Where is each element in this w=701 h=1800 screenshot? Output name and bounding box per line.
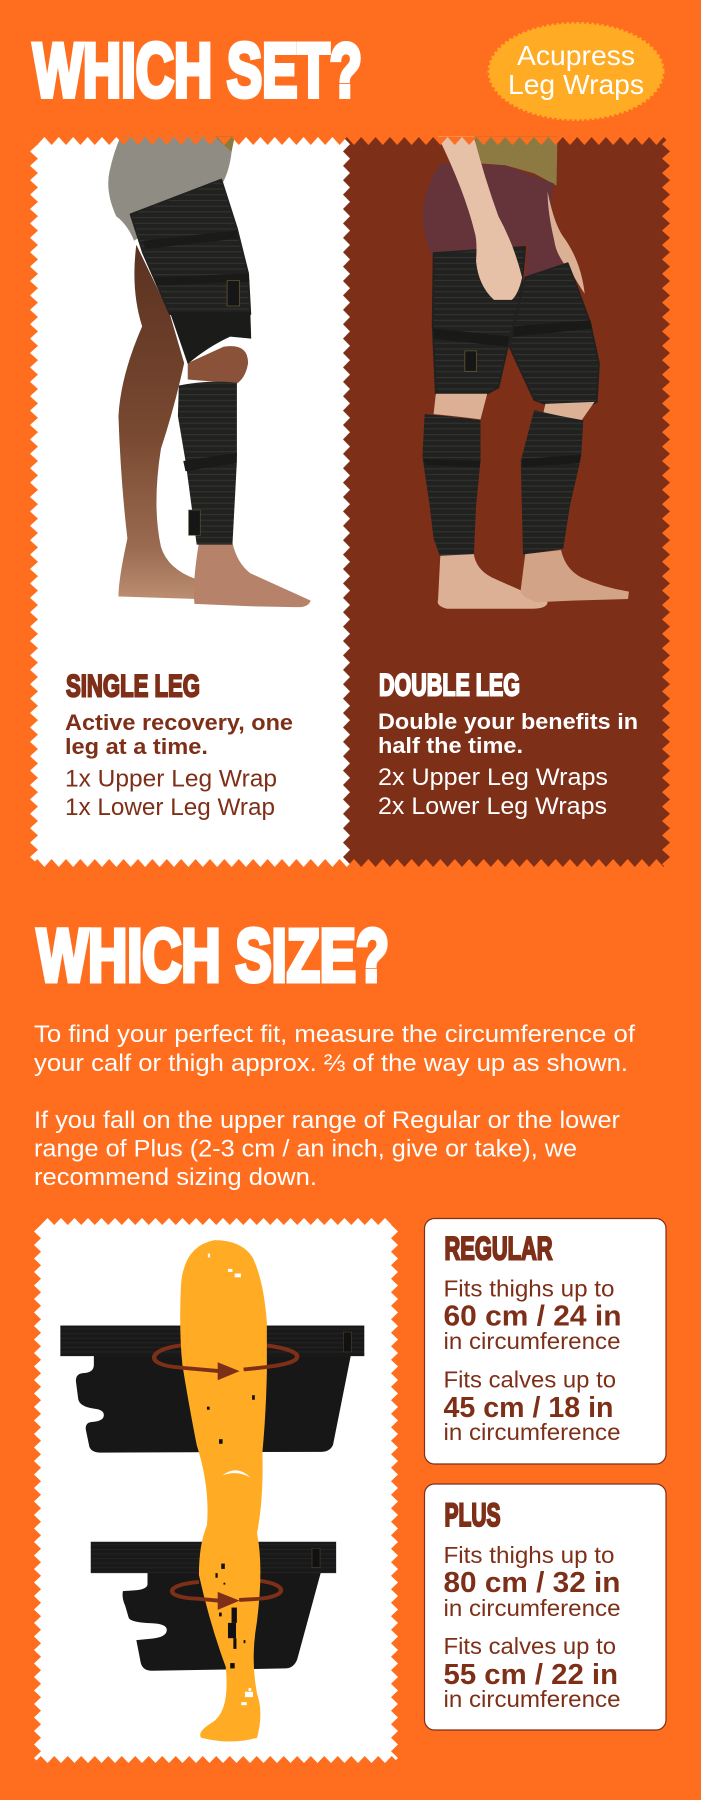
card: plus size: Fits calves up to (444, 1633, 616, 1659)
card: regular size: Fits thighs up to (444, 1276, 614, 1302)
text block: how to measure: If you fall on the upper range of Regular or the lower (34, 1107, 620, 1134)
zigzag edges (30, 137, 350, 867)
card: plus size: 55 cm / 22 in (444, 1659, 618, 1691)
title: which set: WHICH SET? (33, 28, 362, 114)
icon: plus wrap (91, 1542, 336, 1671)
badge: acupress leg wraps (489, 23, 663, 119)
arrow: thigh measure (180, 1362, 268, 1380)
card: regular size: Fits calves up to (444, 1366, 616, 1392)
zigzag edges (343, 137, 670, 867)
card: plus size: Fits thighs up to (444, 1542, 614, 1568)
arrow: calf measure (198, 1592, 260, 1610)
badge: acupress leg wraps: Leg Wraps (508, 69, 644, 100)
panel: single leg (30, 137, 350, 867)
label: single leg: SINGLE LEG (66, 668, 200, 704)
card: plus size: 80 cm / 32 in (444, 1567, 620, 1599)
label: single leg (65, 668, 293, 821)
label: double leg: 2x Upper Leg Wraps (378, 764, 608, 791)
panel: double leg (343, 137, 670, 867)
label: double leg: half the time. (378, 733, 523, 758)
label: double leg: Double your benefits in (378, 709, 638, 734)
card: regular size: in circumference (444, 1419, 620, 1445)
text block: how to measure (34, 1021, 635, 1191)
label: single leg: 1x Upper Leg Wrap (65, 766, 277, 792)
card: plus size: PLUS (444, 1497, 500, 1533)
card: plus size: in circumference (444, 1595, 620, 1621)
centre zigzag (343, 137, 350, 867)
label: single leg: leg at a time. (65, 734, 208, 759)
text block: how to measure: range of Plus (2-3 cm / an inch, give or take), we (34, 1136, 577, 1162)
icon: regular wrap (60, 1326, 364, 1453)
card: regular size (424, 1218, 666, 1464)
text block: how to measure: your calf or thigh approx. ⅔ of the way up as shown. (34, 1050, 628, 1077)
label: double leg (378, 666, 638, 820)
photo: single leg wrapped (108, 137, 311, 607)
label: single leg: 1x Lower Leg Wrap (65, 794, 275, 821)
icon: back of measuring loops (154, 1345, 297, 1599)
badge: acupress leg wraps: Acupress (517, 40, 635, 71)
label: double leg: DOUBLE LEG (379, 666, 520, 702)
photo: double leg wrapped (422, 137, 629, 609)
card: regular size: REGULAR (444, 1230, 552, 1266)
zigzag edges (34, 1218, 398, 1763)
text block: how to measure: To find your perfect fit, measure the circumference of (34, 1021, 635, 1048)
card: regular size: 60 cm / 24 in (444, 1300, 622, 1332)
card: plus size: in circumference (444, 1686, 620, 1712)
icon: yellow leg (180, 1240, 267, 1742)
card: regular size: in circumference (444, 1328, 620, 1354)
label: single leg: Active recovery, one (65, 710, 293, 735)
card: regular size: 45 cm / 18 in (444, 1392, 614, 1424)
text block: how to measure: recommend sizing down. (34, 1164, 317, 1191)
panel: sizing illustration (34, 1218, 398, 1763)
card: plus size (424, 1484, 666, 1730)
label: double leg: 2x Lower Leg Wraps (378, 793, 607, 820)
title: which size: WHICH SIZE? (37, 914, 389, 997)
